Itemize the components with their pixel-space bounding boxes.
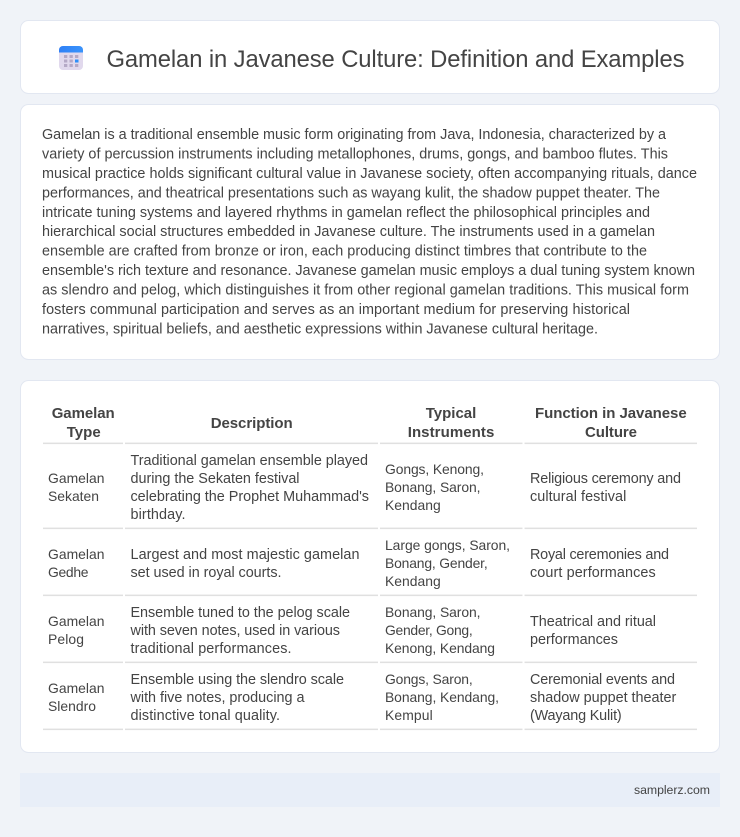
row: Gamelan Pelog: Bonang, Saron, [385,604,480,620]
row: Gamelan Gedhe: set used in royal courts. [130,565,282,581]
row: Gamelan Gedhe: Large gongs, Saron, [385,537,510,553]
table header: Gamelan [52,405,115,422]
text block: description: variety of percussion instruments including metallophones, drums, gongs, and bamboo flutes. This [42,146,668,162]
text block: description: musical practice holds significant cultural value in Javanese society, often accompanying rituals, dance [42,166,697,182]
table [43,405,697,730]
row: Gamelan Slendro: Gamelan [48,680,104,696]
row: Gamelan Slendro: Gongs, Saron, [385,671,473,687]
text block: description: hierarchical social structures embedded in Javanese culture. The instruments used in a gamelan [42,224,655,240]
row: Gamelan Slendro: (Wayang Kulit) [530,708,622,724]
table header: Type [67,424,101,441]
row: Gamelan Gedhe [48,537,669,589]
row: Gamelan Slendro: Ceremonial events and [530,672,675,688]
row: Gamelan Sekaten: Gamelan [48,470,104,486]
icon: calendar [59,46,83,70]
text block: description: Gamelan is a traditional ensemble music form originating from Java, Indonesia, characterized by a [42,127,666,143]
text block: description: intricate tuning systems and layered rhythms in gamelan reflect the philosophical principles and [42,205,650,221]
table header [52,405,687,441]
row: Gamelan Slendro: shadow puppet theater [530,690,677,706]
row: Gamelan Sekaten: Gongs, Kenong, [385,461,484,477]
row: Gamelan Slendro: Kempul [385,707,433,723]
row: Gamelan Sekaten: birthday. [130,507,186,523]
row: Gamelan Pelog: Ensemble tuned to the pelog scale [130,605,350,621]
row: Gamelan Gedhe: Largest and most majestic gamelan [130,547,360,563]
row: Gamelan Slendro: with five notes, producing a [130,690,304,706]
row: Gamelan Pelog [48,604,656,657]
panel: title card [20,20,720,94]
table header: Instruments [408,424,494,441]
row: Gamelan Gedhe: Royal ceremonies and [530,547,669,563]
row: Gamelan Sekaten: cultural festival [530,489,626,505]
row: Gamelan Pelog: Kenong, Kendang [385,640,495,656]
row: Gamelan Sekaten: celebrating the Prophet Muhammad's [130,489,369,505]
row: Gamelan Slendro: Bonang, Kendang, [385,689,499,705]
row: Gamelan Sekaten: Traditional gamelan ensemble played [130,453,368,469]
row: Gamelan Slendro: Slendro [48,698,96,714]
panel: description card [20,104,720,360]
table header: Function in Javanese [535,405,687,422]
row: Gamelan Sekaten: Bonang, Saron, [385,479,480,495]
text block: description: fosters communal participation and serves as an important medium for preserving historical [42,302,630,318]
row: Gamelan Sekaten [48,453,681,523]
row: Gamelan Pelog: Pelog [48,631,84,647]
row: Gamelan Slendro: Ensemble using the slendro scale [130,672,344,688]
footer bar [20,773,720,807]
row: Gamelan Gedhe: Bonang, Gender, [385,555,488,571]
row: Gamelan Gedhe: Gamelan [48,546,104,562]
row: Gamelan Pelog: performances [530,632,618,648]
row: Gamelan Gedhe: Gedhe [48,564,89,580]
row: Gamelan Gedhe: court performances [530,565,656,581]
row: Gamelan Pelog: Gamelan [48,613,104,629]
footer text: samplerz.com [634,783,710,797]
row: Gamelan Pelog: Theatrical and ritual [530,614,656,630]
row: Gamelan Sekaten: Religious ceremony and [530,471,681,487]
row: Gamelan Slendro [48,671,677,724]
text block: description: as slendro and pelog, which distinguishes it from other regional gamelan traditions. This musical form [42,282,689,298]
table header: Culture [585,424,637,441]
table header: Description [211,415,293,432]
text block: description [42,127,697,337]
row: Gamelan Sekaten: Kendang [385,497,441,513]
text block: description: performances, and theatrical presentations such as wayang kulit, the shadow puppet theater. The [42,185,660,201]
panel: table card [20,380,720,752]
row: Gamelan Sekaten: Sekaten [48,488,99,504]
title: Gamelan in Javanese Culture: Definition and Examples [106,46,685,73]
row: Gamelan Pelog: Gender, Gong, [385,622,473,638]
text block: description: ensemble's rich texture and resonance. Javanese gamelan music employs a dual tuning system known [42,263,695,279]
row: Gamelan Slendro: distinctive tonal quality. [130,708,280,724]
text block: description: ensemble are crafted from bronze or iron, each producing distinct timbres that contribute to the [42,244,647,260]
table header: Typical [426,405,476,422]
row: Gamelan Pelog: traditional performances. [130,641,292,657]
row: Gamelan Pelog: with seven notes, used in various [130,623,340,639]
text block: description: narratives, spiritual beliefs, and aesthetic expressions within Javanese cultural heritage. [42,321,598,337]
row: Gamelan Gedhe: Kendang [385,573,441,589]
row: Gamelan Sekaten: during the Sekaten festival [130,471,300,487]
